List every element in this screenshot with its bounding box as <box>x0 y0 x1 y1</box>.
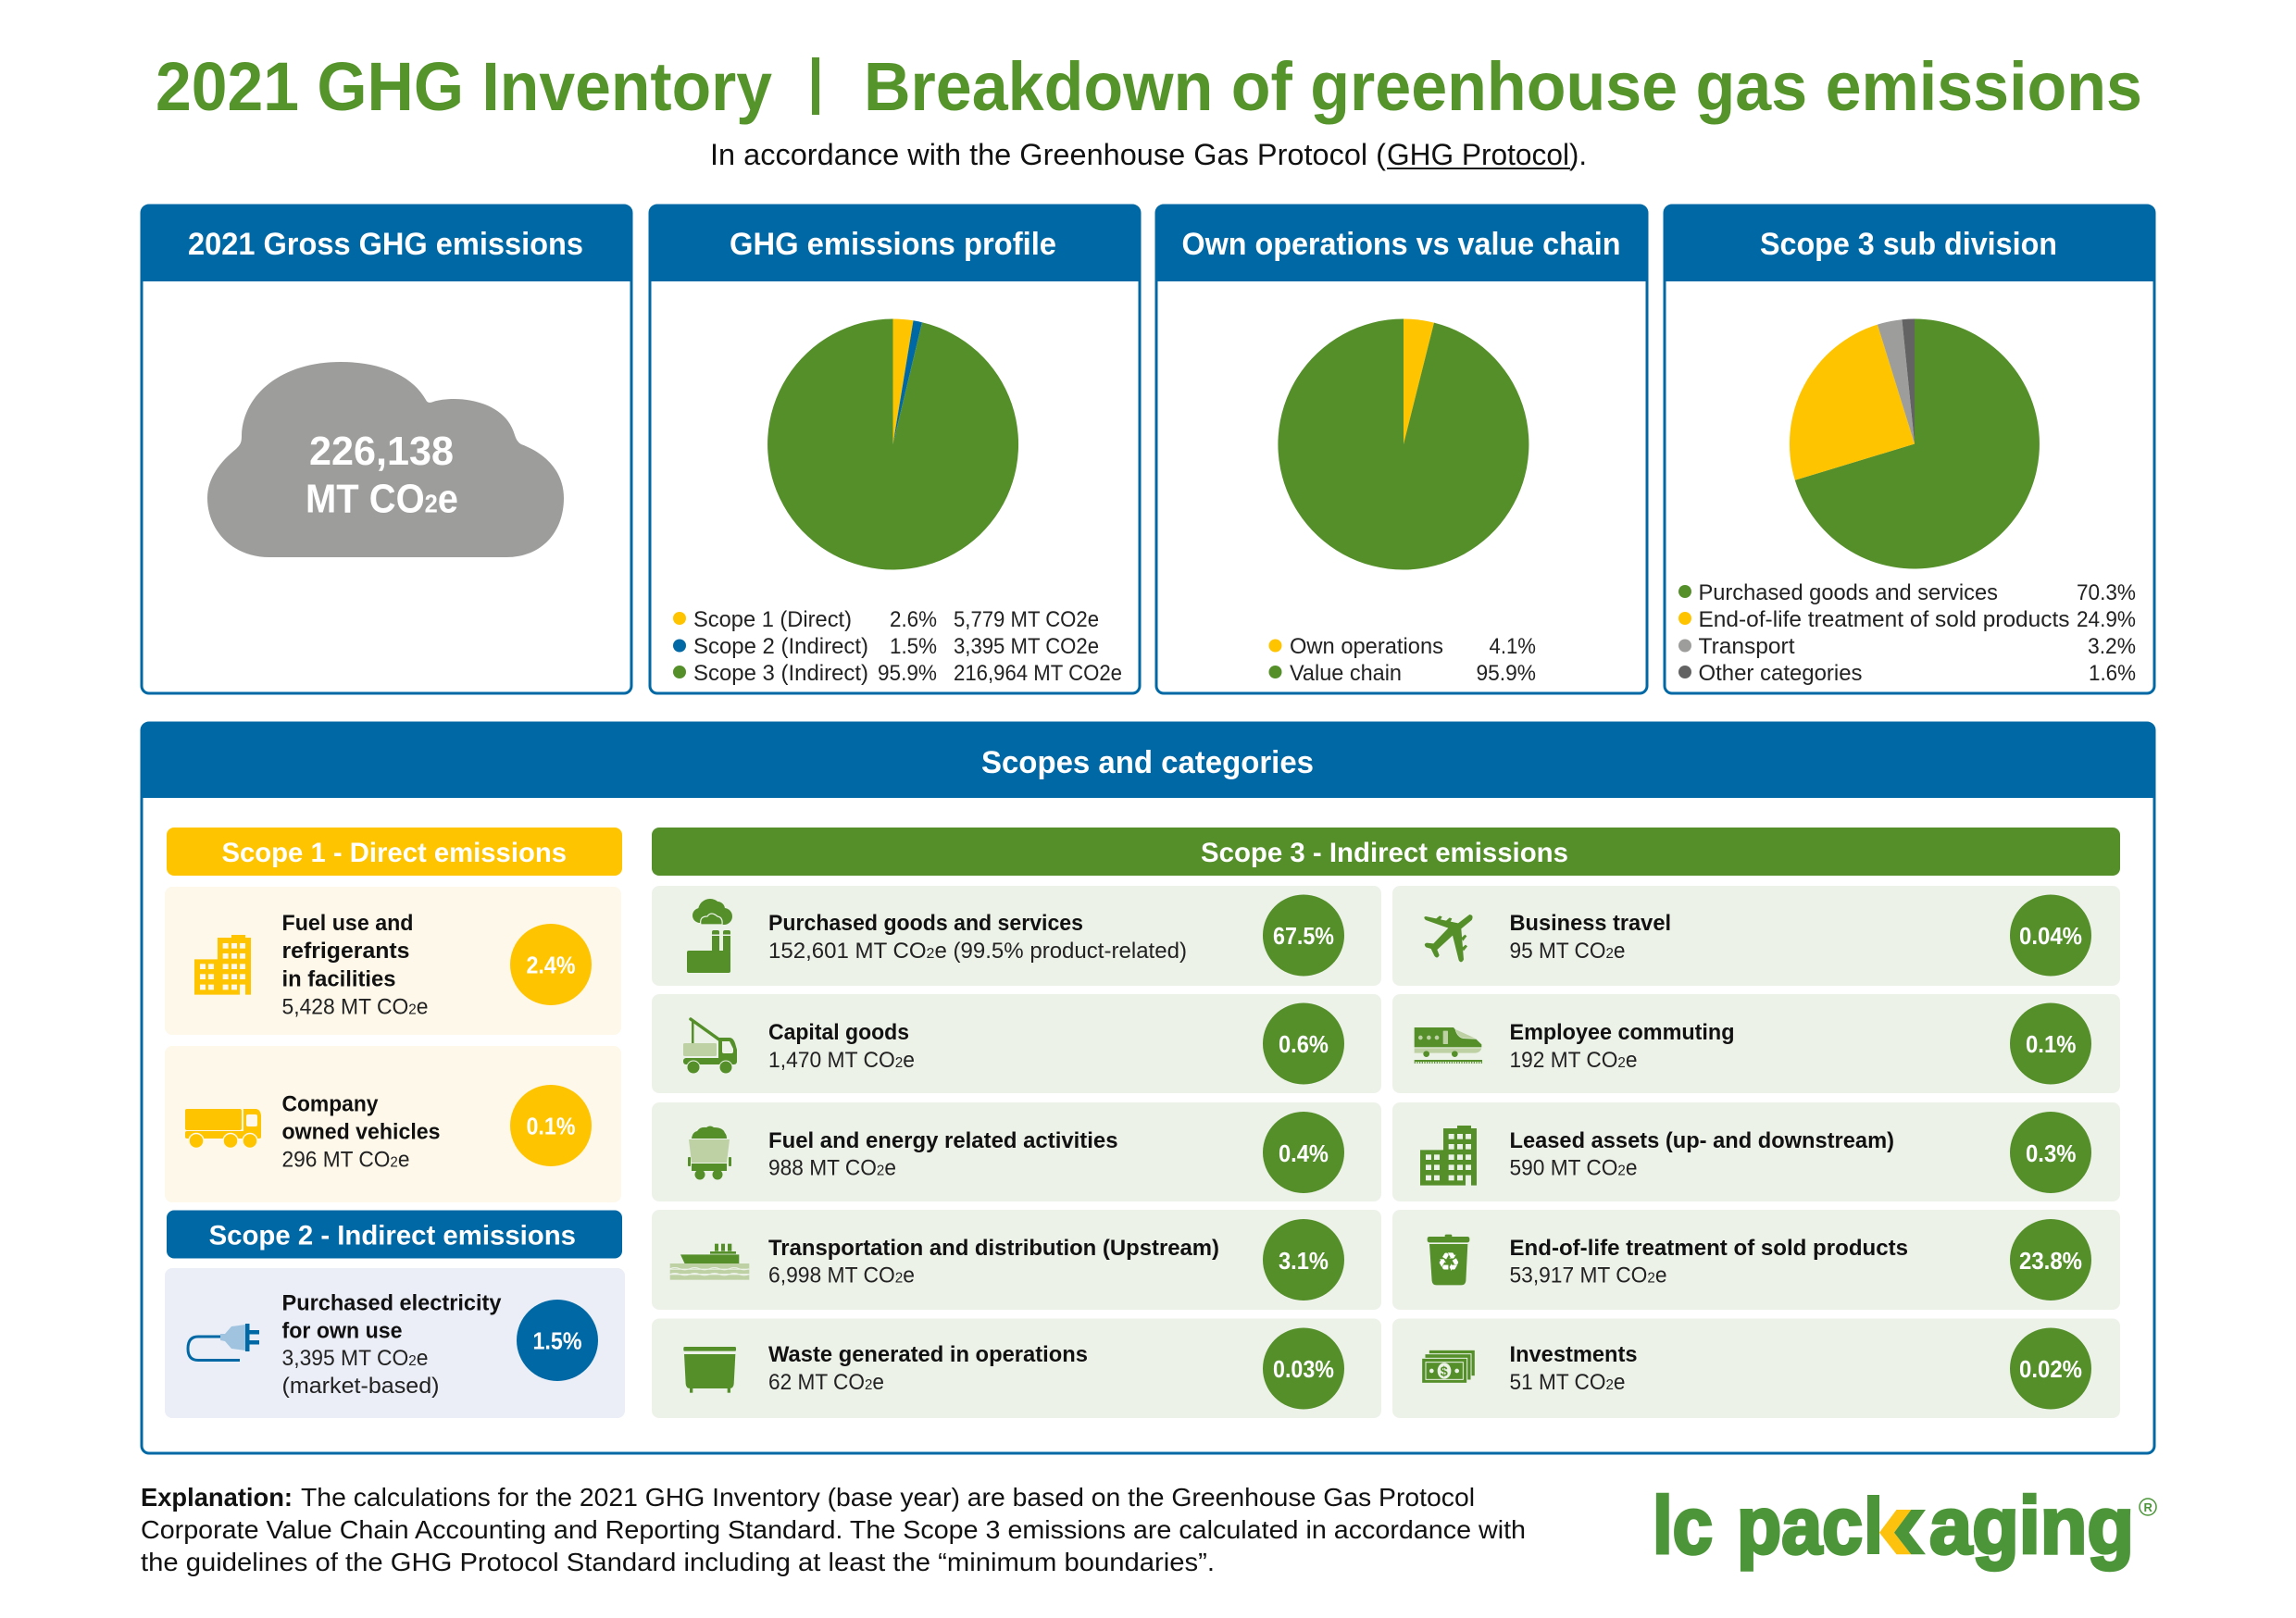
card text: for own use <box>281 1318 402 1344</box>
badge: 23.8% <box>2010 1219 2091 1301</box>
legend: scope 3: Transport <box>1698 634 1795 659</box>
legend: scope 3: Purchased goods and services <box>1698 580 1998 605</box>
card: company owned vehicles <box>165 1046 621 1202</box>
legend: scope 3: 24.9% <box>2077 607 2136 632</box>
badge: 1.5% <box>517 1300 598 1381</box>
card: employee commuting <box>1392 994 2120 1093</box>
card text: 152,601 MT CO2e (99.5% product-related) <box>768 939 1187 964</box>
card: transportation and distribution <box>652 1210 1381 1310</box>
card text: 192 MT CO2e <box>1509 1048 1637 1073</box>
card text: Purchased electricity <box>281 1290 502 1316</box>
card: business travel <box>1392 886 2120 986</box>
title <box>156 48 2142 125</box>
panel heading <box>141 722 2155 798</box>
panel: GHG emissions profile <box>649 205 1141 693</box>
badge: 0.3%: 0.3% <box>2026 1139 2076 1167</box>
card text: Waste generated in operations <box>768 1342 1088 1367</box>
legend: scope 3: Other categories <box>1698 661 1863 686</box>
panel heading: GHG emissions profile <box>730 227 1056 262</box>
card text: Company <box>281 1092 379 1116</box>
legend: scopes: 2.6% <box>890 607 937 632</box>
card text: Investments <box>1509 1342 1637 1367</box>
legend: scopes: Scope 2 (Indirect) <box>693 634 868 659</box>
card text: 988 MT CO2e <box>768 1155 896 1181</box>
badge: 0.1%: 0.1% <box>2026 1030 2076 1058</box>
card text <box>1509 911 1671 964</box>
badge: 67.5%: 67.5% <box>1273 922 1334 950</box>
card text <box>281 1092 441 1172</box>
badge: 0.03% <box>1263 1327 1344 1409</box>
card text: Fuel use and <box>281 911 413 936</box>
icon: recycling bin <box>1428 1235 1469 1285</box>
legend: scopes: 5,779 MT CO2e <box>954 607 1099 632</box>
subtitle: GHG Protocol <box>1387 138 1569 171</box>
legend: own vs value chain: 95.9% <box>1476 661 1536 686</box>
card text <box>768 1342 1088 1395</box>
card: end-of-life treatment <box>1392 1210 2120 1310</box>
panel heading <box>649 205 1141 281</box>
card: waste generated in operations <box>652 1318 1381 1418</box>
icon: factory with cloud <box>687 899 732 973</box>
icon: banknotes <box>1422 1350 1475 1383</box>
badge: 3.1% <box>1263 1219 1344 1301</box>
icon: cloud with total: 226,138 <box>309 429 454 474</box>
icon: coal cart <box>688 1126 731 1179</box>
panel heading <box>1155 205 1648 281</box>
badge: 0.3% <box>2010 1112 2091 1193</box>
badge: 0.04%: 0.04% <box>2019 922 2082 950</box>
legend: scopes: 3,395 MT CO2e <box>954 634 1099 659</box>
card text: in facilities <box>281 966 396 992</box>
panel heading: Own operations vs value chain <box>1181 227 1620 262</box>
card text <box>768 911 1187 964</box>
card text: 5,428 MT CO2e <box>281 994 428 1020</box>
card text: refrigerants <box>281 939 409 964</box>
card: fuel and energy related activities <box>652 1102 1381 1201</box>
card: purchased electricity <box>165 1268 625 1418</box>
card text: owned vehicles <box>281 1120 441 1144</box>
card: leased assets <box>1392 1102 2120 1201</box>
explanation text: The calculations for the 2021 GHG Inventory (base year) are based on the Greenhouse Gas Protocol <box>301 1483 1475 1512</box>
badge: 0.03%: 0.03% <box>1273 1355 1334 1383</box>
legend: own vs value chain: 4.1% <box>1489 634 1536 659</box>
badge: 1.5%: 1.5% <box>533 1327 581 1355</box>
icon: banknotes: $ <box>1441 1365 1448 1380</box>
card text: Leased assets (up- and downstream) <box>1509 1128 1894 1153</box>
card: purchased goods and services <box>652 886 1381 986</box>
card text: (market-based) <box>281 1374 439 1399</box>
icon: building <box>1420 1126 1477 1186</box>
panel heading <box>1664 205 2155 281</box>
icon: cloud with total: MT CO2e <box>306 476 458 522</box>
panel: 2021 gross GHG emissions <box>141 205 632 693</box>
panel: scopes and categories <box>141 722 2155 1453</box>
panel heading: Scopes and categories <box>981 745 1314 780</box>
legend: own vs value chain: Own operations <box>1290 634 1443 659</box>
scope 1 heading <box>167 828 622 876</box>
explanation text: Corporate Value Chain Accounting and Reporting Standard. The Scope 3 emissions are calculated in accordance with <box>141 1515 1526 1544</box>
card text: 590 MT CO2e <box>1509 1155 1637 1181</box>
icon: dumpster <box>683 1347 736 1393</box>
panel: scope 3 sub division <box>1664 205 2155 693</box>
card text <box>768 1236 1219 1288</box>
icon: truck <box>185 1109 261 1148</box>
card text: 296 MT CO2e <box>281 1148 409 1172</box>
logo: lc packaging: aging <box>1929 1481 2134 1571</box>
title: Breakdown of greenhouse gas emissions <box>864 48 2142 125</box>
card text: Business travel <box>1509 911 1671 936</box>
card text: 3,395 MT CO2e <box>281 1346 428 1371</box>
icon: building <box>194 935 251 995</box>
card text <box>281 911 428 1020</box>
explanation text: Explanation: <box>141 1483 293 1512</box>
explanation text <box>141 1483 1526 1576</box>
card text <box>768 1128 1118 1181</box>
badge: 3.1%: 3.1% <box>1279 1247 1329 1275</box>
panel heading <box>141 205 632 281</box>
explanation text: the guidelines of the GHG Protocol Standard including at least the “minimum boundaries”. <box>141 1548 1215 1576</box>
scope 1 heading: Scope 1 - Direct emissions <box>222 838 567 868</box>
card text <box>1509 1020 1735 1073</box>
badge: 2.4% <box>510 924 592 1005</box>
card text: 53,917 MT CO2e <box>1509 1263 1666 1288</box>
legend: scopes: 1.5% <box>890 634 937 659</box>
badge: 0.1% <box>2010 1003 2091 1085</box>
legend: scopes: Scope 1 (Direct) <box>693 607 852 632</box>
card text: 1,470 MT CO2e <box>768 1048 915 1073</box>
card text <box>1509 1236 1908 1288</box>
panel heading: Scope 3 sub division <box>1760 227 2057 262</box>
badge: 23.8%: 23.8% <box>2019 1247 2082 1275</box>
logo: lc packaging <box>1653 1481 2156 1571</box>
card: fuel use and refrigerants <box>165 887 621 1035</box>
card text: Capital goods <box>768 1020 909 1045</box>
scope 3 heading <box>652 828 2120 876</box>
legend: own vs value chain: Value chain <box>1290 661 1402 686</box>
logo: lc packaging: pac <box>1737 1481 1863 1571</box>
pie chart: scopes <box>767 318 1018 569</box>
legend: scope 3: 3.2% <box>2088 634 2136 659</box>
card text <box>1509 1128 1894 1181</box>
legend: scope 3: 1.6% <box>2089 661 2136 686</box>
badge: 0.1% <box>510 1085 592 1166</box>
panel heading: 2021 Gross GHG emissions <box>188 227 583 262</box>
scope 2 heading: Scope 2 - Indirect emissions <box>209 1220 576 1251</box>
icon: cloud with total <box>207 362 564 557</box>
icon: recycling bin: ♻ <box>1437 1247 1460 1277</box>
icon: plug <box>188 1324 259 1361</box>
subtitle: In accordance with the Greenhouse Gas Protocol ( <box>710 138 1386 171</box>
card text <box>1509 1342 1637 1395</box>
card text <box>281 1290 502 1399</box>
badge: 0.4% <box>1263 1112 1344 1193</box>
card text: 51 MT CO2e <box>1509 1370 1626 1395</box>
card: capital goods <box>652 994 1381 1093</box>
badge: 0.04% <box>2010 894 2091 976</box>
logo: lc packaging: lc <box>1653 1481 1713 1571</box>
card text: 62 MT CO2e <box>768 1370 884 1395</box>
legend: scope 3: End-of-life treatment of sold products <box>1698 607 2070 632</box>
card text <box>768 1020 915 1073</box>
badge: 0.1%: 0.1% <box>526 1113 576 1140</box>
panel: own operations vs value chain <box>1155 205 1648 693</box>
legend: scope 3: 70.3% <box>2077 580 2136 605</box>
legend: scopes <box>673 607 1122 686</box>
legend: scopes: 216,964 MT CO2e <box>954 661 1122 686</box>
card: investments <box>1392 1318 2120 1418</box>
legend: scopes: 95.9% <box>878 661 937 686</box>
card text: Transportation and distribution (Upstream) <box>768 1236 1219 1261</box>
icon: crane truck <box>683 1019 737 1074</box>
card text: Employee commuting <box>1509 1020 1735 1045</box>
icon: plane <box>1424 915 1473 962</box>
legend: scopes: Scope 3 (Indirect) <box>693 661 868 686</box>
icon: ship <box>670 1244 749 1280</box>
icon: train <box>1415 1027 1482 1063</box>
card text: Purchased goods and services <box>768 911 1083 936</box>
title: 2021 GHG Inventory <box>156 48 772 125</box>
card text: 95 MT CO2e <box>1509 939 1626 964</box>
legend: own vs value chain <box>1268 634 1536 686</box>
badge: 0.6%: 0.6% <box>1279 1030 1329 1058</box>
badge: 2.4%: 2.4% <box>526 952 576 979</box>
badge: 67.5% <box>1263 894 1344 976</box>
card text: Fuel and energy related activities <box>768 1128 1118 1153</box>
badge: 0.02% <box>2010 1327 2091 1409</box>
pie chart: own vs value chain <box>1278 318 1529 570</box>
card text: 6,998 MT CO2e <box>768 1263 915 1288</box>
badge: 0.6% <box>1263 1003 1344 1085</box>
scope 3 heading: Scope 3 - Indirect emissions <box>1201 838 1568 868</box>
card text: End-of-life treatment of sold products <box>1509 1236 1908 1261</box>
badge: 0.4%: 0.4% <box>1279 1139 1329 1167</box>
scope 2 heading <box>167 1211 622 1259</box>
legend: scope 3 <box>1678 580 2136 686</box>
pie chart: scope 3 <box>1790 318 2040 568</box>
logo: lc packaging: R <box>2144 1500 2153 1514</box>
badge: 0.02%: 0.02% <box>2019 1355 2082 1383</box>
subtitle: ). <box>1569 138 1587 171</box>
